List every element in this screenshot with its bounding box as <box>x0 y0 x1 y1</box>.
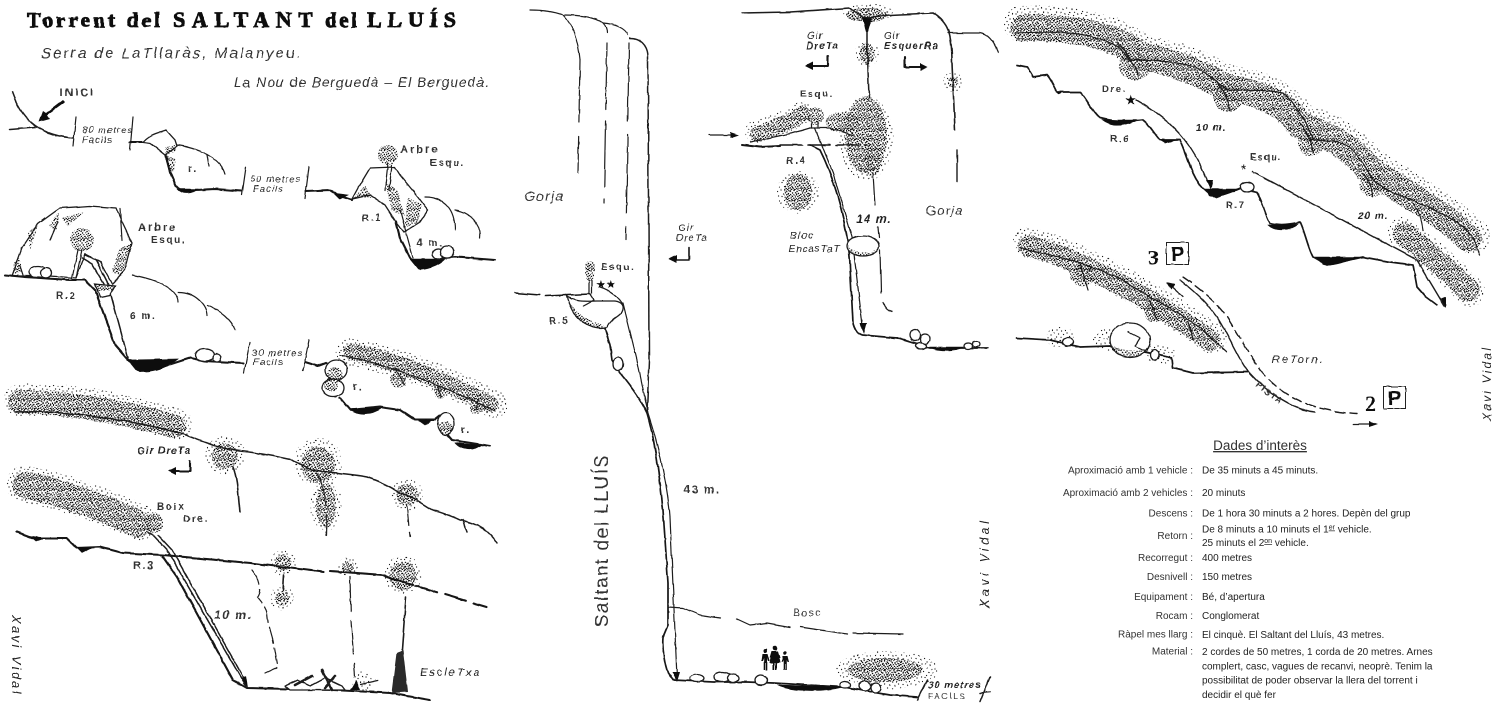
turn right marker <box>669 223 708 263</box>
rappel R.2 with boulder and tree: Arbre <box>138 222 177 234</box>
turn right marker: DreTa <box>676 233 708 244</box>
row: gear: 2 cordes de 50 metres, 1 corda de 20 metres. Arnes <box>1202 647 1433 658</box>
row: return: on <box>1264 538 1272 545</box>
rappel 10 m: 10 m. <box>1196 123 1227 134</box>
row: return: 25 minuts el 2 <box>1202 538 1264 549</box>
row: approach with two vehicles: 20 minuts <box>1202 488 1245 499</box>
parking 2 <box>1365 386 1406 416</box>
rappel R.5: R.5 <box>549 316 569 327</box>
row: elevation: 150 metres <box>1202 572 1252 583</box>
gorge walls: Gorja <box>524 188 564 204</box>
subtitle: mountain range: Serra de LaTllaràs, Malanyeu. <box>41 45 302 62</box>
rappel 20 m <box>1241 152 1446 308</box>
row: longest rappel <box>1118 630 1384 641</box>
panel: right column, return route <box>1017 242 1406 427</box>
stretch: 30 metres easy: 30 metres <box>252 348 303 359</box>
stretch: 30 metres easy <box>244 340 309 373</box>
row: longest rappel: El cinquè. El Saltant del Lluís, 43 metres. <box>1202 630 1384 641</box>
row: equipment: Equipament : <box>1134 592 1193 603</box>
rappel 20 m: * <box>1241 161 1247 177</box>
return track: PISTA <box>1254 380 1286 406</box>
vertical name of the waterfall: Saltant del LLUÍS <box>592 455 613 627</box>
return track: ReTorn. <box>1272 354 1325 366</box>
rappel R.3: Dre. <box>183 514 209 525</box>
row: rock: Rocam : <box>1156 611 1193 622</box>
small drops r. with vegetation: r. <box>461 424 471 436</box>
stretch: 50 metres easy: 50 metres <box>250 174 301 185</box>
row: return: vehicle. <box>1272 538 1309 549</box>
rappel R.4: Gorja <box>926 203 964 218</box>
row: gear: decidir el què fer <box>1202 690 1277 701</box>
rappel R.5: Esqu. <box>601 262 635 273</box>
stretch: 80 metres easy <box>73 117 133 150</box>
title <box>27 7 456 32</box>
rappel R.5: ★★ <box>596 279 616 291</box>
turn right marker: Gir DreTa <box>137 446 191 457</box>
gorge exit with blocks and vegetation: 30 metres <box>928 680 981 691</box>
row: return: Retorn : <box>1157 531 1193 542</box>
stream end with boulders <box>1017 323 1248 373</box>
rappel R.5 <box>515 261 635 328</box>
rappel 10 m: ★ <box>1125 92 1137 107</box>
gorge walls <box>524 10 649 413</box>
rappel R.1 with tree: Esqu. <box>430 158 465 169</box>
big rappel 43 m: 43 m. <box>684 484 720 496</box>
panel: left column, upper canyon section <box>5 87 495 449</box>
row: approach with one vehicle: De 35 minuts a 45 minuts. <box>1202 466 1318 476</box>
rock and small drop r. <box>130 130 242 193</box>
parking 2: 2 <box>1365 391 1376 416</box>
rappel R.4: EncasTaT <box>788 243 841 255</box>
author signature, right: Xavi Vidal <box>1480 347 1494 422</box>
rappel R.3: R.3 <box>133 560 155 572</box>
row: rock: Conglomerat <box>1202 611 1259 622</box>
rappel 10 m <box>1102 84 1227 190</box>
rappel R.4: 14 m. <box>856 212 892 226</box>
rappel 20 m: 20 m. <box>1357 211 1389 222</box>
rock and small drop r.: r. <box>188 163 198 175</box>
author signature, left: Xavi Vidal <box>9 614 24 695</box>
author signature, centre: Xavi Vidal <box>977 520 992 609</box>
parking 3: 3 <box>1148 245 1159 270</box>
row: gear: Material : <box>1152 646 1193 658</box>
parking 3 <box>1148 242 1188 270</box>
row: descent: De 1 hora 30 minuts a 2 hores. Depèn del grup <box>1202 508 1411 520</box>
row: elevation <box>1147 572 1252 583</box>
turn markers: EsquerRa <box>884 41 939 52</box>
stretch: 50 metres easy: Facils <box>253 184 284 195</box>
rappel R.4: Bloc <box>790 230 814 242</box>
row: approach with one vehicle <box>1068 466 1318 476</box>
turn markers <box>805 31 939 71</box>
title: del <box>325 8 357 32</box>
vegetated wall near the road <box>1020 242 1227 352</box>
stretch: 80 metres easy: 80 metres <box>82 125 133 136</box>
rappel R.2 with boulder and tree: R.2 <box>56 291 76 302</box>
title: Torrent del <box>27 8 160 32</box>
row: approach with two vehicles: Aproximació amb 2 vehicles : <box>1063 488 1193 499</box>
forest line: Bosc <box>793 607 822 619</box>
icon: people <box>761 646 789 670</box>
rappel R.1 with tree: 4 m. <box>417 238 443 249</box>
vegetated upper wall <box>1015 24 1480 292</box>
row: longest rappel: Ràpel mes llarg : <box>1118 630 1193 640</box>
turn right marker <box>137 446 191 475</box>
small drops r. with vegetation <box>305 352 494 449</box>
row: gear <box>1152 646 1433 701</box>
rappel R.4: Esqu. <box>800 89 834 100</box>
big rappel 43 m <box>605 303 720 682</box>
rappel R.4 <box>709 89 988 350</box>
rappel R.3: 10 m. <box>214 608 253 622</box>
stretch: 50 metres easy <box>242 167 309 198</box>
rappel 10 m: Dre. <box>1102 84 1127 95</box>
rappel R.3: EscleTxa <box>420 667 481 679</box>
stream bed with pools: R.7 <box>1226 200 1246 211</box>
turn markers: DreTa <box>806 41 839 52</box>
panel: central column, upper right section R.4 <box>709 4 998 350</box>
panel: central column, big waterfall <box>515 10 992 702</box>
stream bed with pools: R.6 <box>1110 134 1130 145</box>
turn markers: Gir <box>807 31 823 42</box>
rappel R.3 <box>17 484 487 700</box>
turn right marker: Gir <box>678 223 694 234</box>
title: LLUÍS <box>367 7 456 32</box>
rappel R.2 with boulder and tree <box>5 206 243 372</box>
return track <box>1166 277 1378 427</box>
stream bed with pools <box>1017 65 1437 305</box>
rappel R.2 with boulder and tree: 6 m. <box>130 311 156 322</box>
rappel 20 m: Esqu. <box>1250 152 1282 163</box>
parking 3: P <box>1171 244 1184 266</box>
rappel R.2 with boulder and tree: Esqu. <box>151 235 186 246</box>
row: equipment: Bé, d’apertura <box>1202 592 1265 603</box>
row: distance: 400 metres <box>1202 553 1252 564</box>
small drops r. with vegetation: r. <box>353 381 363 393</box>
row: elevation: Desnivell : <box>1147 572 1193 583</box>
row: gear: possibilitat de poder observar la llera del torrent i <box>1202 676 1418 686</box>
rappel R.1 with tree <box>306 144 495 269</box>
start road and arrow <box>10 87 95 138</box>
row: equipment <box>1134 592 1265 603</box>
stretch: 80 metres easy: Facils <box>82 135 113 146</box>
canyon junction <box>742 4 998 182</box>
gorge exit with blocks and vegetation <box>673 651 990 702</box>
row: distance <box>1138 553 1252 564</box>
row: return <box>1157 524 1372 549</box>
turn markers: Gir <box>884 31 900 42</box>
row: return: er <box>1329 524 1336 532</box>
row: return: De 8 minuts a 10 minuts el 1 <box>1202 524 1329 536</box>
table heading: Dades d’interès <box>1213 438 1307 453</box>
row: return: vehicle. <box>1335 524 1372 536</box>
row: distance: Recorregut : <box>1138 553 1193 564</box>
row: gear: complert, casc, vagues de recanvi, neoprè. Tenim la <box>1202 662 1433 672</box>
subtitle: location: La Nou de Berguedà – El Berguedà. <box>234 74 490 90</box>
start road and arrow: INICI <box>60 87 95 99</box>
rappel R.1 with tree: R.1 <box>362 213 382 224</box>
panel: right column, R.6 and R.7 <box>1015 24 1494 422</box>
rappel R.3: Boix <box>157 502 185 513</box>
parking 2: P <box>1388 388 1401 410</box>
title: SALTANT <box>173 7 313 32</box>
panel: data of interest table <box>1063 438 1433 701</box>
row: approach with one vehicle: Aproximació amb 1 vehicle : <box>1068 466 1193 476</box>
stretch: 30 metres easy: Facils <box>253 357 284 368</box>
row: rock <box>1156 611 1259 622</box>
gorge exit with blocks and vegetation: FACILS <box>928 691 967 701</box>
panel: left column, lower canyon section <box>9 400 497 700</box>
rappel R.4: R.4 <box>786 156 806 167</box>
forest line <box>668 607 903 634</box>
upper wall vegetation <box>15 400 497 543</box>
rappel R.1 with tree: Arbre <box>400 144 439 156</box>
row: descent: Descens : <box>1149 508 1193 520</box>
